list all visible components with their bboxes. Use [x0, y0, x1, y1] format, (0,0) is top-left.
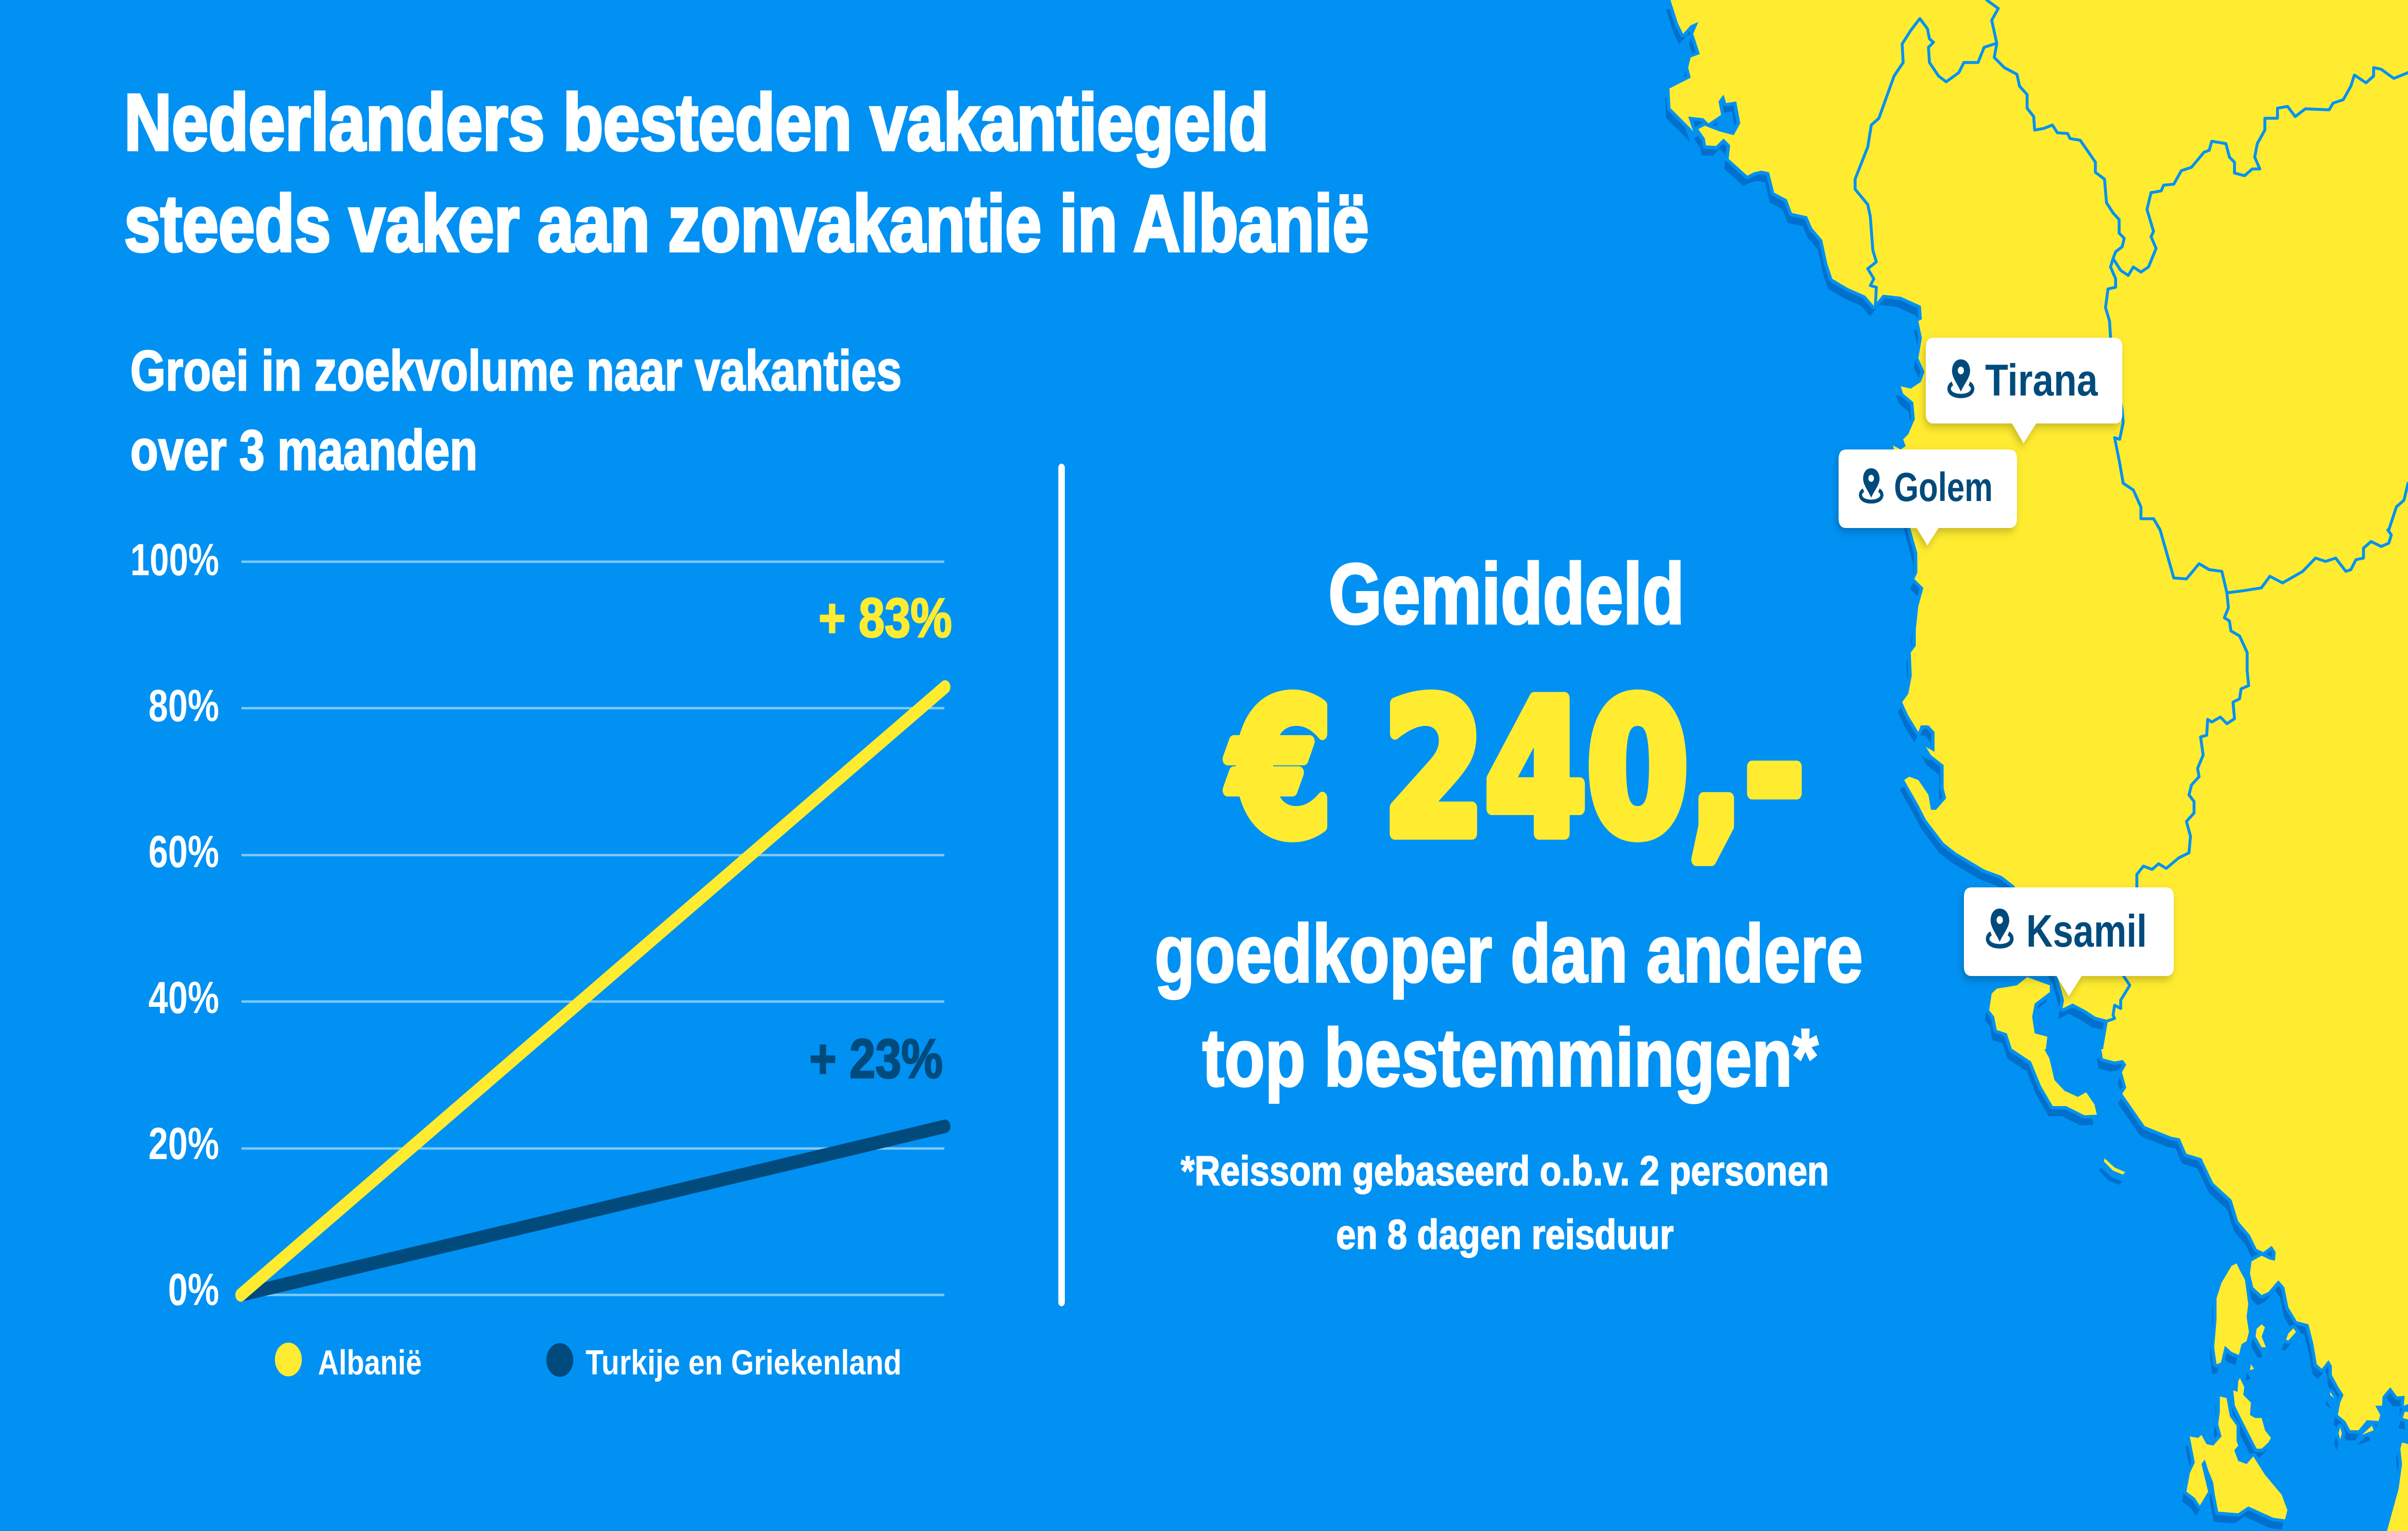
value label: Turkije en Griekenland: + 23%	[810, 1028, 943, 1090]
footnote: *Reissom gebaseerd o.b.v. 2 personen	[1181, 1148, 1829, 1194]
title	[124, 78, 1369, 268]
value label: Albanië: + 83%	[819, 587, 952, 649]
title: steeds vaker aan zonvakantie in Albanië	[124, 179, 1369, 268]
y-axis labels: 20%	[148, 1119, 219, 1169]
footnote: en 8 dagen reisduur	[1336, 1212, 1674, 1258]
legend: Albanië	[318, 1343, 422, 1382]
map label: Tirana: Tirana	[1985, 355, 2098, 405]
title: Nederlanders besteden vakantiegeld	[124, 78, 1269, 167]
y-axis labels: 80%	[148, 681, 219, 731]
chart heading: over 3 maanden	[131, 418, 478, 482]
y-axis labels: 100%	[131, 535, 219, 585]
legend	[275, 1343, 902, 1382]
map label: Golem: Golem	[1894, 465, 1993, 510]
chart heading: Groei in zoekvolume naar vakanties	[131, 339, 902, 402]
y-axis labels	[131, 535, 219, 1315]
text: Gemiddeld: Gemiddeld	[1328, 546, 1685, 642]
y-axis labels: 60%	[148, 827, 219, 877]
line: Turkije en Griekenland	[241, 1126, 945, 1295]
text: goedkoper	[1154, 908, 1863, 1103]
map label: Ksamil: Ksamil	[2026, 906, 2147, 957]
text: goedkoper: goedkoper dan andere	[1154, 908, 1863, 999]
footnote	[1181, 1148, 1829, 1258]
divider	[1058, 468, 1066, 1302]
y-axis labels: 40%	[148, 973, 219, 1023]
map label: Ksamil	[1964, 887, 2174, 996]
chart heading	[131, 339, 902, 482]
big number: € 240,-	[1226, 662, 1805, 878]
line chart	[131, 535, 952, 1315]
legend: Turkije en Griekenland	[586, 1343, 902, 1382]
line: Albanië	[241, 687, 945, 1295]
y-axis labels: 0%	[168, 1265, 219, 1315]
text: goedkoper: top bestemmingen*	[1202, 1012, 1818, 1103]
map label: Golem	[1839, 449, 2017, 545]
map: Albania coastline with borders	[1665, 0, 2408, 1531]
map label: Tirana	[1926, 338, 2122, 443]
